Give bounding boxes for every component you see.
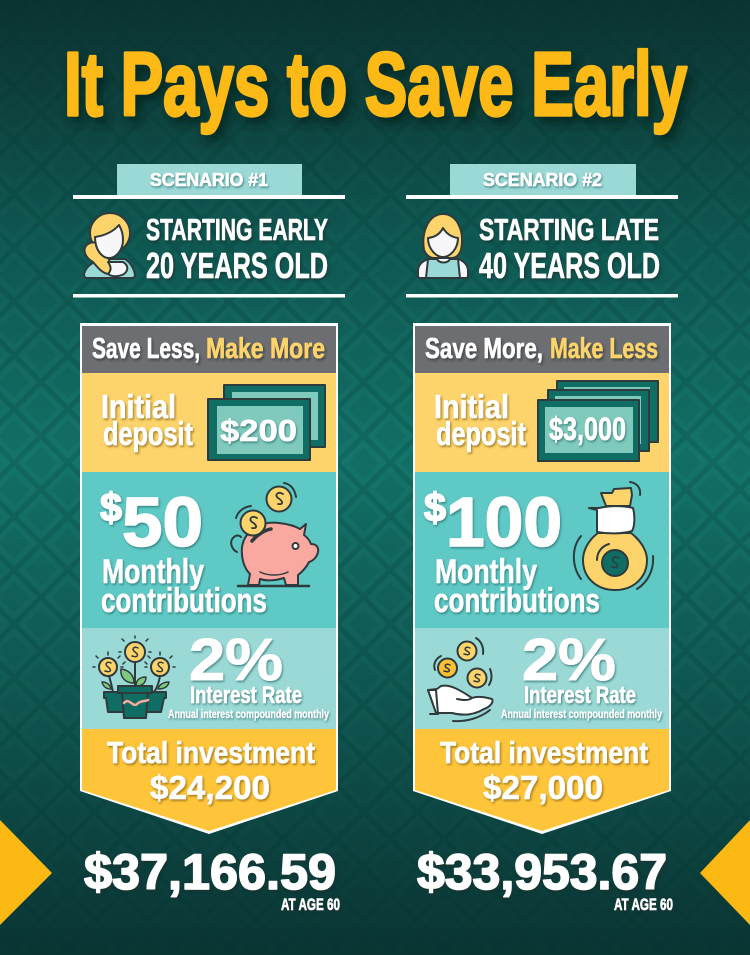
monthly contributions label: contributions [434, 582, 600, 620]
monthly contributions label [434, 553, 600, 620]
heading: starting late [479, 212, 660, 286]
panel: scenario 2 banner [413, 323, 671, 834]
icon: hand with coins [428, 638, 493, 721]
arrow: left gold triangle [0, 820, 52, 925]
interest rate label: Annual interest compounded monthly [501, 709, 662, 721]
column: scenario 1 [73, 164, 345, 914]
scenario 2 tag [450, 164, 636, 196]
initial deposit label: Initial [101, 388, 176, 425]
icon: plants with coin flowers [93, 636, 175, 718]
heading: starting late: 40 YEARS OLD [479, 245, 660, 286]
icon: woman with ponytail [84, 213, 135, 278]
monthly contributions label: contributions [101, 582, 267, 620]
monthly contributions label [101, 553, 267, 620]
initial deposit label: deposit [436, 415, 526, 452]
column: scenario 2 [406, 164, 678, 914]
arrow: right gold triangle [700, 820, 750, 925]
monthly amount $50: $ [100, 486, 122, 530]
icon: two bills $200 [208, 385, 325, 460]
icon: piggy bank with coins [231, 483, 318, 586]
interest rate label: Interest Rate [190, 682, 302, 709]
monthly amount $100: 100 [446, 483, 562, 561]
scenario 1 tag [117, 164, 302, 196]
total investment: $27,000 [483, 769, 603, 806]
banner heading [425, 333, 658, 365]
banner heading [92, 333, 325, 365]
heading: starting late: STARTING LATE [479, 212, 659, 247]
banner heading: Save Less, [92, 333, 200, 365]
initial deposit label [101, 388, 193, 452]
result amount 2: AT AGE 60 [614, 895, 673, 914]
initial deposit label [434, 388, 526, 452]
icon: two bills $200: $200 [220, 413, 297, 448]
banner heading: Save More, [425, 333, 543, 365]
interest rate label [168, 682, 329, 721]
banner heading: Make Less [550, 333, 658, 365]
panel: scenario 1 banner [80, 323, 338, 834]
scenario 1 tag: SCENARIO #1 [150, 170, 268, 190]
interest rate 2%: 2% [522, 627, 616, 693]
icon: stacked bills $3,000 [538, 381, 658, 461]
monthly amount $100: $ [424, 486, 446, 530]
scenario 2 tag: SCENARIO #2 [483, 170, 602, 190]
monthly contributions label: Monthly [102, 553, 204, 591]
icon: money bag in hand [574, 482, 653, 590]
icon: stacked bills $3,000: $3,000 [549, 411, 626, 447]
heading: starting early [146, 212, 328, 286]
total investment [107, 735, 315, 806]
interest rate label: Annual interest compounded monthly [168, 709, 329, 721]
initial deposit label: Initial [434, 388, 509, 425]
total investment: $24,200 [150, 769, 270, 806]
heading: starting early: 20 YEARS OLD [146, 245, 328, 286]
monthly amount $50: 50 [122, 483, 203, 561]
initial deposit label: deposit [103, 415, 193, 452]
interest rate 2%: 2% [189, 627, 283, 693]
icon: woman with short hair [418, 214, 468, 278]
banner heading: Make More [206, 333, 325, 365]
total investment: Total investment [440, 735, 648, 770]
interest rate label [501, 682, 662, 721]
total investment: Total investment [107, 735, 315, 770]
result amount 2: $33,953.67 [417, 844, 667, 900]
interest rate label: Interest Rate [524, 682, 636, 709]
result amount 1: AT AGE 60 [281, 895, 340, 914]
total investment [440, 735, 648, 806]
heading: starting early: STARTING EARLY [146, 212, 328, 247]
result amount 1: $37,166.59 [84, 844, 336, 900]
monthly contributions label: Monthly [435, 553, 537, 591]
